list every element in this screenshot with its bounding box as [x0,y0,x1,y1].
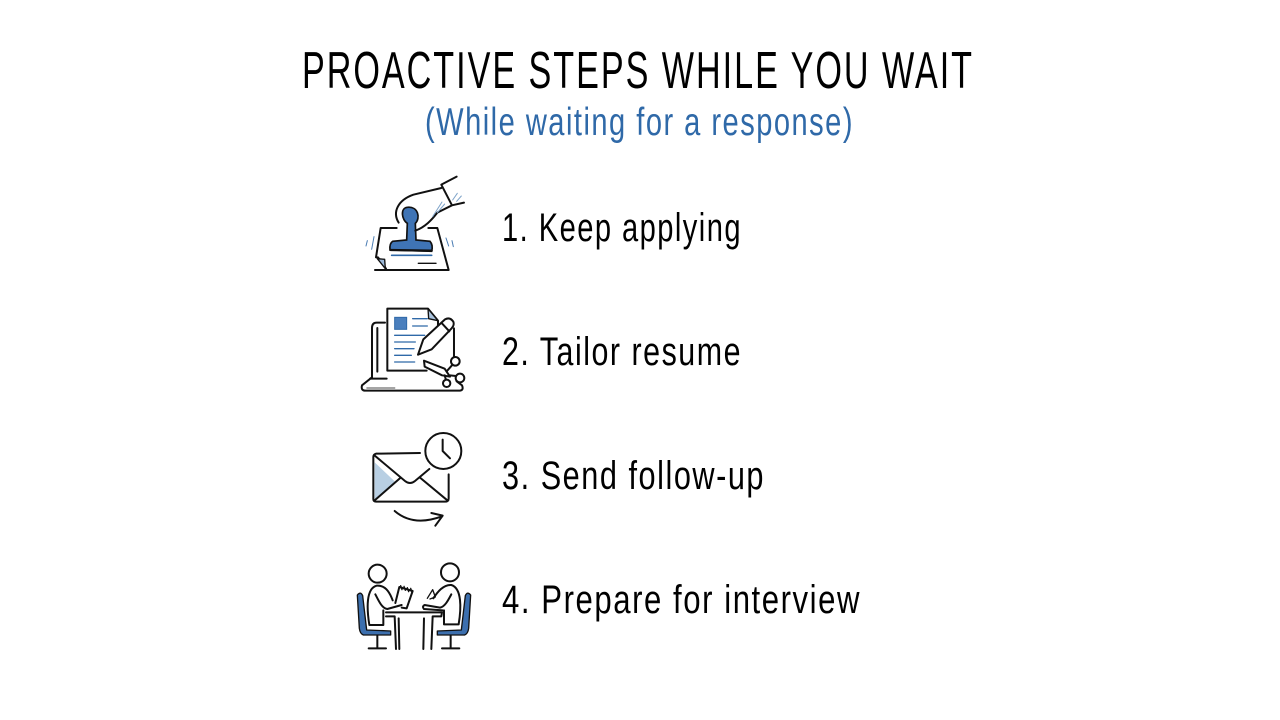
icon part: pencil [418,318,454,355]
icon: laptop with resume, pencil and scissors [362,309,464,391]
icon part: laptop [362,323,463,391]
icon: two people at an interview table [357,563,471,649]
icon part: document [387,309,438,371]
icon part: scissors [424,361,450,377]
icon part: table [386,612,442,649]
icon part: right chair [437,593,471,635]
step 4 text: 4. Prepare for interview [502,578,861,622]
step 3 text: 3. Send follow-up [502,454,765,498]
icon part: clock [425,433,461,469]
step 1 text: 1. Keep applying [502,206,742,250]
subtitle: (While waiting for a response) [425,101,854,144]
icon: envelope with clock and arrow [373,433,461,526]
icon part: left chair [357,593,391,635]
step 2 text: 2. Tailor resume [502,330,742,374]
icon part: stamp [390,207,432,251]
icon part: shading [375,462,395,500]
icon part: right person [441,563,459,581]
icon part: hand and cuff [396,177,464,231]
icon part: left person [369,565,387,583]
icon part: envelope [373,453,449,502]
icon part: paper [375,228,449,270]
icon: hand stamping a document [366,177,464,270]
icon part: arrow [395,511,443,526]
